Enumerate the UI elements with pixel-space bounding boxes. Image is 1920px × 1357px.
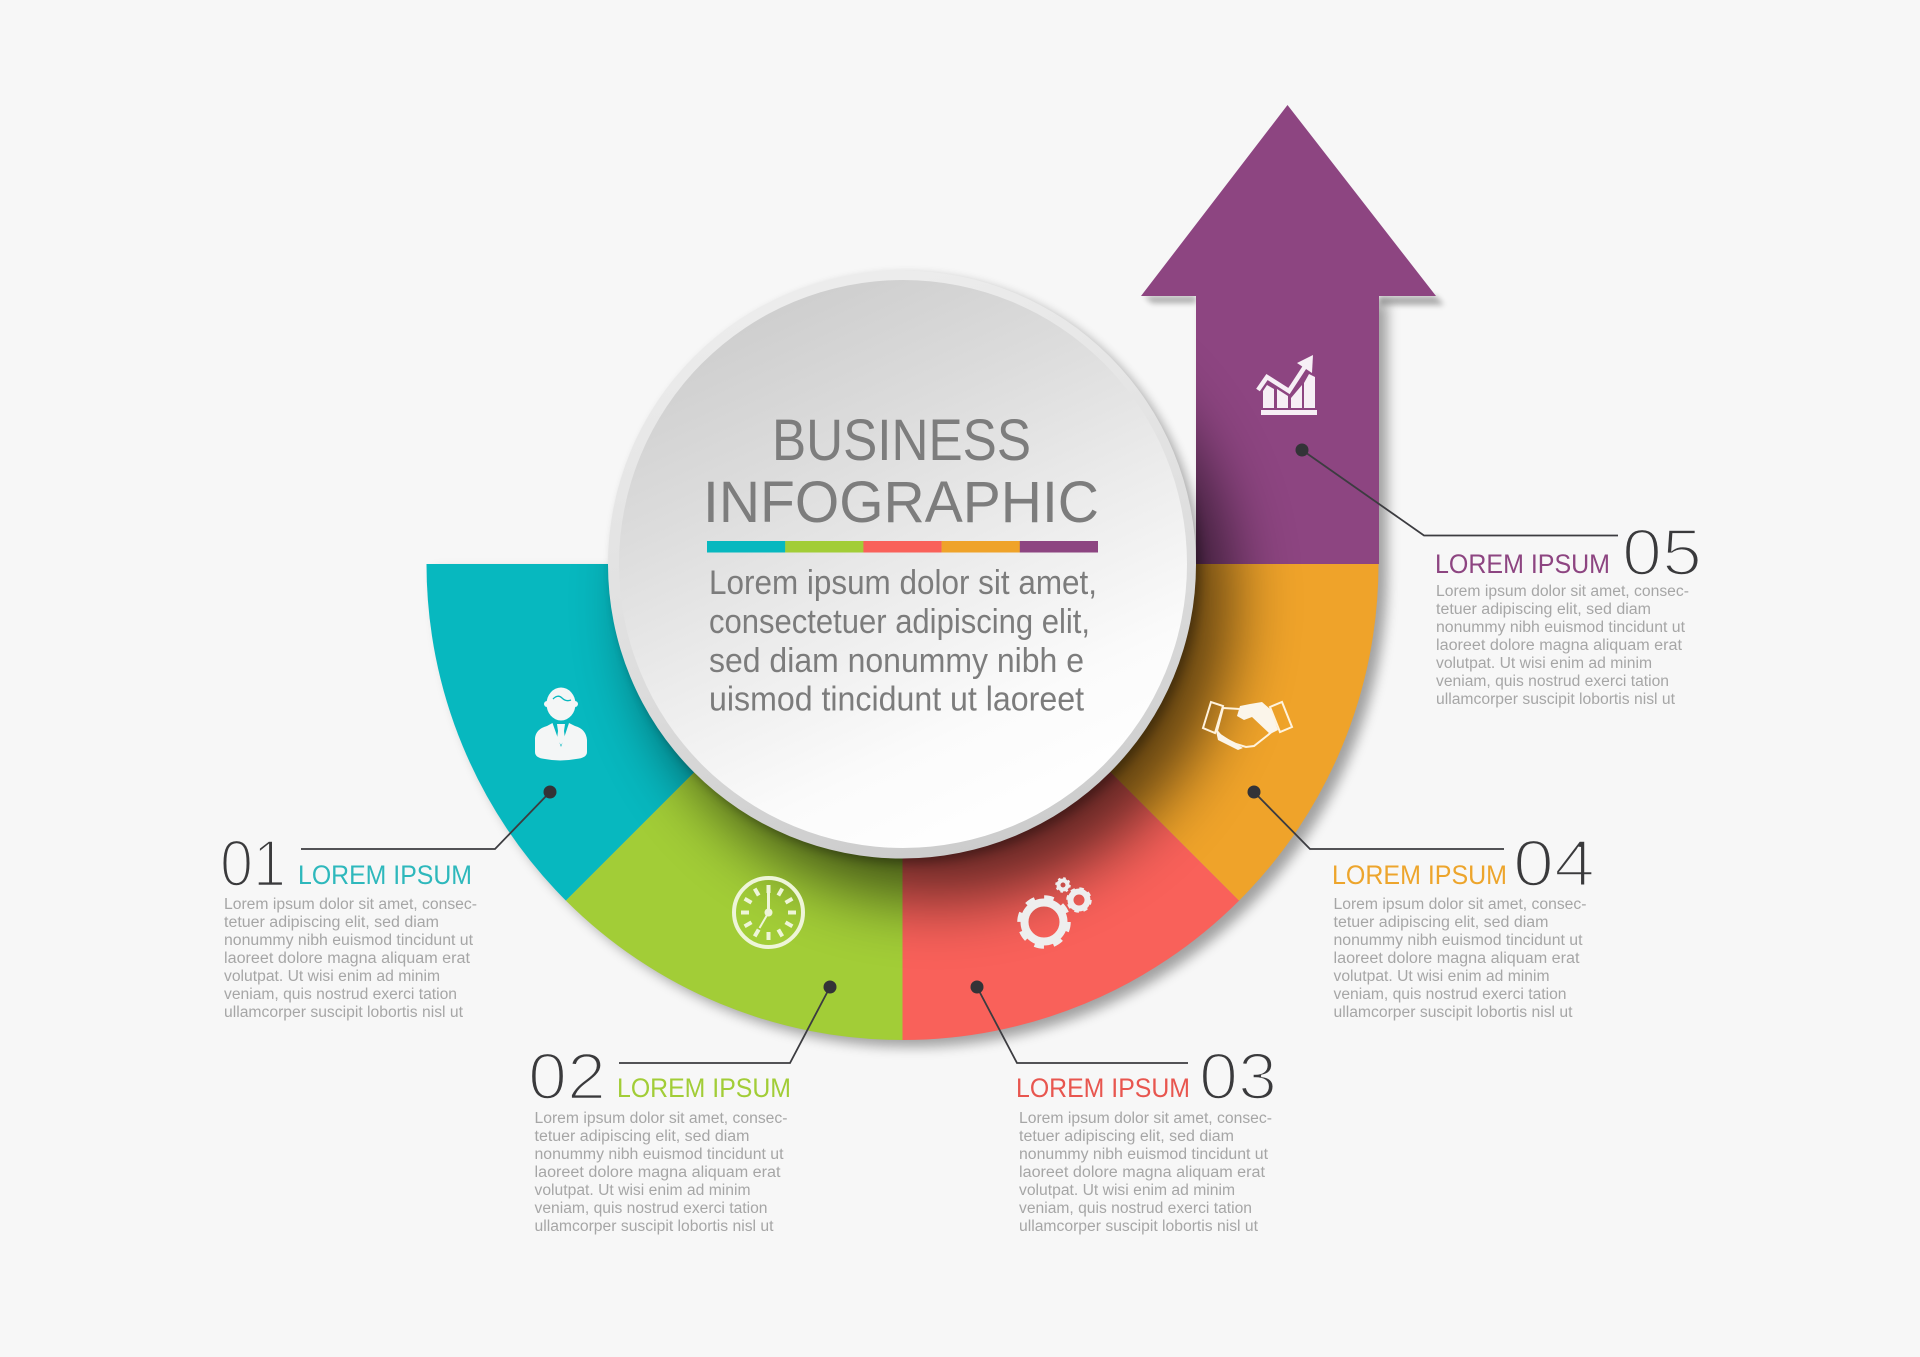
dot 05	[1296, 444, 1308, 456]
number 03: 03	[1199, 1039, 1277, 1113]
number 05: 05	[1622, 515, 1702, 589]
title: INFOGRAPHIC	[703, 470, 1099, 535]
text 01: Lorem ipsum dolor sit amet, consec-	[224, 896, 477, 913]
dot 01	[544, 786, 556, 798]
circle face	[619, 280, 1187, 848]
text 03: nonummy nibh euismod tincidunt ut	[1019, 1146, 1269, 1163]
segment 4: orange	[902, 564, 1378, 901]
segment 2: green	[566, 564, 902, 1040]
number 02: 02	[528, 1039, 606, 1113]
leader line 03	[977, 987, 1188, 1063]
text 02: nonummy nibh euismod tincidunt ut	[534, 1146, 784, 1163]
dot 02	[824, 980, 836, 994]
heading 02: LOREM IPSUM	[617, 1073, 791, 1103]
text 05: Lorem ipsum dolor sit amet, consec-	[1436, 583, 1689, 600]
segment 3: red	[902, 564, 1239, 1040]
colour bar	[707, 541, 1098, 552]
intro text	[709, 564, 1097, 718]
text 05: veniam, quis nostrud exerci tation	[1436, 673, 1669, 690]
intro text: uismod tincidunt ut laoreet	[709, 680, 1085, 718]
heading 01: LOREM IPSUM	[298, 860, 472, 890]
icon: person	[535, 688, 587, 760]
panel: central circle	[608, 270, 1196, 858]
text 04: tetuer adipiscing elit, sed diam	[1334, 914, 1548, 931]
callout 02	[528, 980, 836, 1235]
text 04: laoreet dolore magna aliquam erat	[1334, 950, 1580, 967]
dot 03	[970, 980, 984, 994]
shadow of central circle on the segments	[640, 306, 1232, 898]
text 04: volutpat. Ut wisi enim ad minim	[1334, 968, 1550, 985]
text 03: ullamcorper suscipit lobortis nisl ut	[1019, 1218, 1259, 1235]
text 05: laoreet dolore magna aliquam erat	[1436, 637, 1683, 654]
text 02: ullamcorper suscipit lobortis nisl ut	[534, 1218, 774, 1235]
callout 03	[970, 980, 1277, 1235]
text 03: Lorem ipsum dolor sit amet, consec-	[1019, 1110, 1272, 1127]
text 01: tetuer adipiscing elit, sed diam	[224, 914, 439, 931]
text 03: laoreet dolore magna aliquam erat	[1019, 1164, 1266, 1181]
callout 01	[220, 786, 556, 1021]
text 05: tetuer adipiscing elit, sed diam	[1436, 601, 1651, 618]
leader line 05	[1302, 450, 1618, 536]
icon: handshake	[1203, 702, 1292, 750]
text 01: nonummy nibh euismod tincidunt ut	[224, 932, 474, 949]
segment 1: teal	[426, 564, 902, 901]
title: BUSINESS	[772, 408, 1031, 473]
text 02	[534, 1110, 788, 1235]
text 04	[1334, 896, 1586, 1021]
number 04: 04	[1513, 826, 1595, 900]
tight shadow of central circle	[613, 275, 1201, 863]
dot 04	[1248, 786, 1260, 798]
text 02: volutpat. Ut wisi enim ad minim	[534, 1182, 750, 1199]
panel: semicircle arrow diagram	[426, 105, 1436, 1040]
text 04: ullamcorper suscipit lobortis nisl ut	[1334, 1004, 1573, 1021]
heading 03: LOREM IPSUM	[1016, 1073, 1190, 1103]
intro text: consectetuer adipiscing elit,	[709, 603, 1090, 641]
drop shadow of arc and shaft	[436, 303, 1388, 1047]
text 05: nonummy nibh euismod tincidunt ut	[1436, 619, 1686, 636]
text 04: nonummy nibh euismod tincidunt ut	[1334, 932, 1583, 949]
text 05: volutpat. Ut wisi enim ad minim	[1436, 655, 1652, 672]
intro text: sed diam nonummy nibh e	[709, 642, 1084, 680]
segment 5: purple arrow	[1141, 105, 1436, 564]
text 01: ullamcorper suscipit lobortis nisl ut	[224, 1004, 464, 1021]
intro text: Lorem ipsum dolor sit amet,	[709, 564, 1097, 602]
number 01: 01	[220, 826, 286, 900]
circle rim	[608, 270, 1196, 858]
text 01: veniam, quis nostrud exerci tation	[224, 986, 457, 1003]
text 01: volutpat. Ut wisi enim ad minim	[224, 968, 440, 985]
text 02: veniam, quis nostrud exerci tation	[534, 1200, 768, 1217]
text 03: veniam, quis nostrud exerci tation	[1019, 1200, 1252, 1217]
text 04: veniam, quis nostrud exerci tation	[1334, 986, 1566, 1003]
text 02: tetuer adipiscing elit, sed diam	[534, 1128, 750, 1145]
leader line 02	[619, 987, 830, 1063]
callout 05	[1296, 444, 1702, 708]
callout 04	[1248, 786, 1595, 1021]
text 03: volutpat. Ut wisi enim ad minim	[1019, 1182, 1235, 1199]
text 01	[224, 896, 477, 1021]
text 03	[1019, 1110, 1272, 1235]
icon: gears	[1020, 878, 1090, 946]
icon: clock	[734, 878, 803, 947]
heading 04: LOREM IPSUM	[1332, 860, 1507, 890]
icon: growth chart	[1258, 355, 1317, 415]
text 02: laoreet dolore magna aliquam erat	[534, 1164, 781, 1181]
leader line 04	[1254, 792, 1504, 849]
text 02: Lorem ipsum dolor sit amet, consec-	[534, 1110, 788, 1127]
text 03: tetuer adipiscing elit, sed diam	[1019, 1128, 1234, 1145]
heading 05: LOREM IPSUM	[1435, 549, 1610, 579]
text 05	[1436, 583, 1689, 708]
text 04: Lorem ipsum dolor sit amet, consec-	[1334, 896, 1586, 913]
leader line 01	[301, 792, 550, 849]
title	[703, 408, 1099, 535]
text 01: laoreet dolore magna aliquam erat	[224, 950, 471, 967]
text 05: ullamcorper suscipit lobortis nisl ut	[1436, 691, 1676, 708]
drop shadow under arrow head wings	[1144, 296, 1444, 305]
